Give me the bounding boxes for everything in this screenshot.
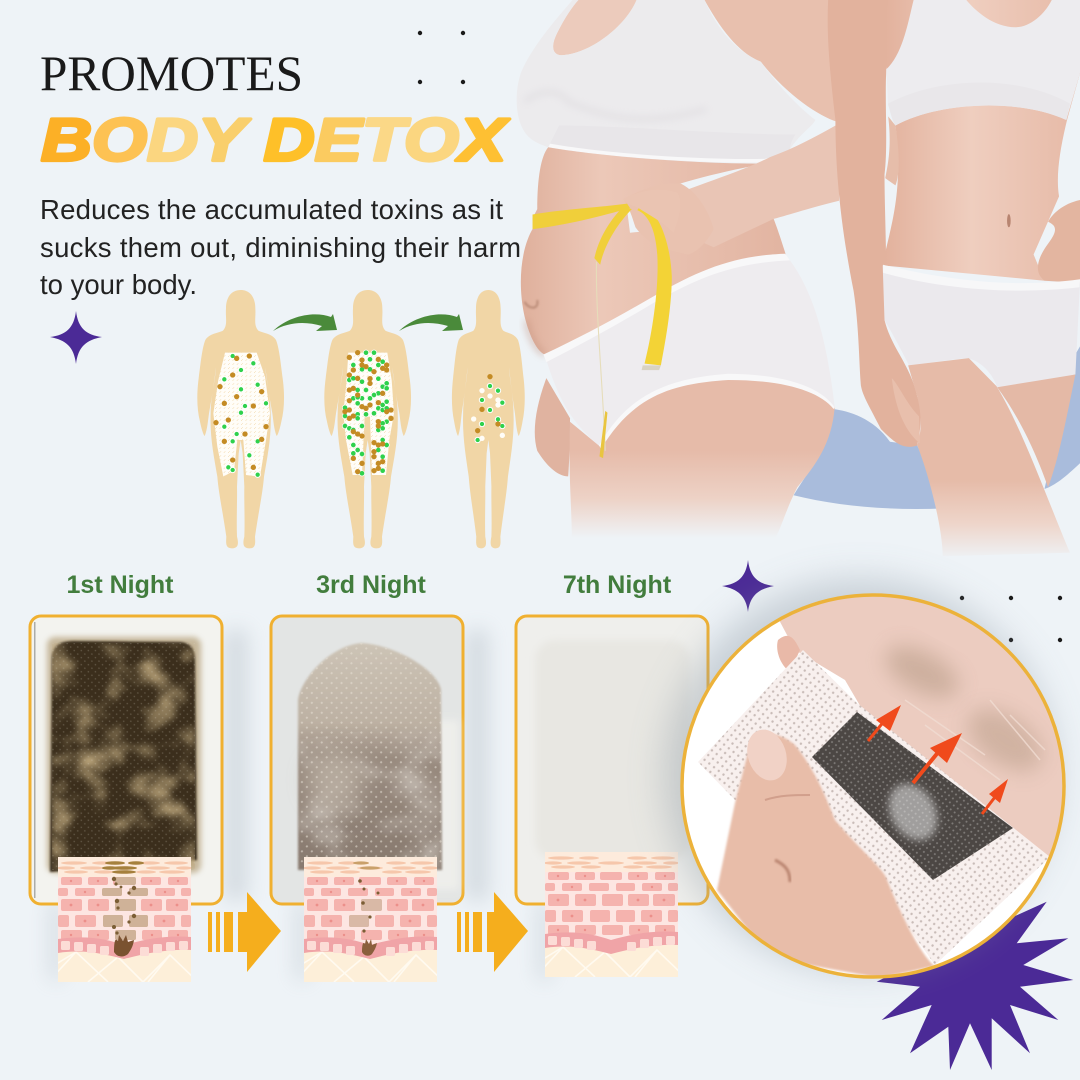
arrow: 3rd to 7th night <box>457 892 528 972</box>
white mesh patch <box>698 650 1050 965</box>
blue background arc behind the models <box>794 344 1080 509</box>
heading: 1st night: 1st Night <box>67 571 174 599</box>
body diagram: three silhouettes with toxin dots <box>197 290 525 548</box>
arrow: second to third body <box>399 314 463 331</box>
decorative dots: right of circle <box>960 596 1062 642</box>
silhouette: first body <box>197 290 284 548</box>
photo: slim model <box>828 0 1080 556</box>
holding hand <box>717 734 935 978</box>
decorative dots: top centre <box>418 31 465 84</box>
icon: purple sparkle top of circle <box>722 560 774 612</box>
icon: purple sparkle left <box>50 311 102 364</box>
circle shadow <box>664 579 1056 971</box>
heading: 7th night: 7th Night <box>563 571 672 599</box>
red arrows showing toxins drawn out <box>868 705 1008 814</box>
silhouette: second body <box>324 290 411 548</box>
title: body detox: BODY DETOX <box>41 106 511 174</box>
title: promotes: PROMOTES <box>40 45 303 101</box>
soft shadows behind the patches <box>50 630 550 980</box>
gold circle ring <box>682 595 1064 977</box>
fingertip <box>777 636 800 672</box>
panel: circular photo of patch on underarm <box>681 594 1068 978</box>
arrow: 1st to 3rd night <box>208 892 281 972</box>
used patch: grey brown <box>298 643 442 870</box>
description text: sucks them out, diminishing their harm <box>40 232 521 263</box>
description text: to your body. <box>40 269 197 300</box>
panel: 7th night patch <box>516 616 708 904</box>
underarm skin <box>778 594 1068 860</box>
skin diagram: 7th night <box>535 852 685 977</box>
heading: 3rd night: 3rd Night <box>316 571 427 599</box>
panel: 1st night patch <box>30 616 222 904</box>
description text: Reduces the accumulated toxins as it <box>40 194 503 225</box>
arrow: first to second body <box>273 314 337 331</box>
icon: yellow measuring tape <box>533 204 672 458</box>
skin diagram: 3rd night <box>294 857 444 982</box>
photo: before and after waists <box>517 0 1080 556</box>
toxins rising: many <box>102 861 148 956</box>
photo: larger model <box>517 0 839 538</box>
icon: purple starburst <box>877 902 1073 1070</box>
used patch: nearly clean <box>535 640 690 860</box>
skin diagram: 1st night <box>48 857 198 982</box>
toxins rising: fewer <box>349 861 382 956</box>
dark absorbed toxins area <box>812 712 1013 880</box>
description text <box>40 194 521 300</box>
used patch: very dark <box>50 641 197 872</box>
silhouette: third body <box>452 290 525 548</box>
panel: 3rd night patch <box>271 616 463 904</box>
